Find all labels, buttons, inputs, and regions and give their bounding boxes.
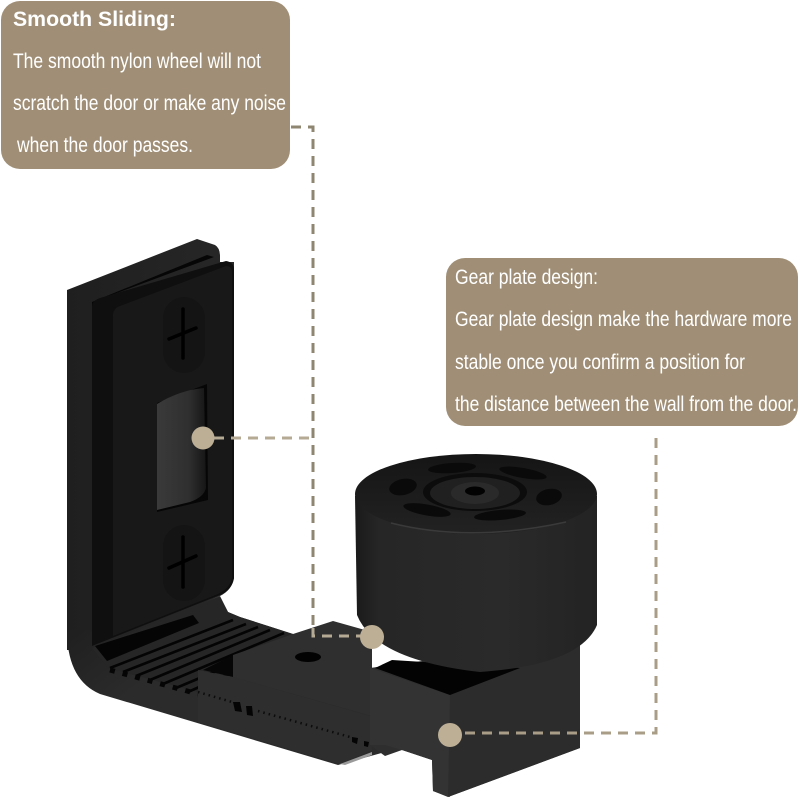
wheel top face <box>355 454 597 534</box>
screw slot top <box>163 297 205 373</box>
ridge teeth <box>110 670 198 694</box>
callout panel: gear plate design <box>446 258 798 426</box>
heading: gear plate design: Gear plate design: <box>455 265 598 289</box>
stop block <box>370 640 580 797</box>
connector: roller dot <box>214 436 313 440</box>
side roller <box>157 384 208 512</box>
gear ridges <box>110 620 284 692</box>
wheel hub <box>423 473 527 511</box>
fine gear teeth <box>198 692 350 737</box>
nylon wheel <box>355 454 597 672</box>
callout dot: wheel <box>360 625 384 649</box>
heading: smooth sliding: Smooth Sliding: <box>13 7 176 31</box>
wheel side <box>355 496 597 672</box>
connector: gear plate <box>465 432 656 733</box>
wheel slots <box>388 461 563 522</box>
groove under top edge <box>92 255 214 306</box>
text: smooth sliding line 1: The smooth nylon wheel will not <box>13 49 261 73</box>
screw slot bottom <box>163 525 205 601</box>
callout dot: roller <box>192 426 214 450</box>
callout panel: smooth sliding <box>1 1 290 169</box>
text: smooth sliding line 2: scratch the door or make any noise <box>13 91 286 115</box>
ridge floor <box>92 597 293 692</box>
callout dot: gear plate <box>438 723 462 747</box>
underside sliver <box>340 752 372 765</box>
mounting plate face <box>113 266 232 636</box>
shadow strip <box>95 615 199 661</box>
curved lower shell <box>67 596 400 765</box>
connector: smooth sliding <box>291 127 313 628</box>
mounting plate <box>92 261 234 646</box>
plate front <box>198 670 372 764</box>
connector: wheel dot <box>313 628 362 636</box>
gear notches <box>233 702 392 752</box>
text: smooth sliding line 3: when the door passes. <box>16 133 193 157</box>
plate shadow <box>203 655 233 677</box>
back plate <box>67 239 234 650</box>
plate with hole <box>233 621 372 716</box>
bracket: door stop body <box>67 239 400 765</box>
connector lines <box>214 127 656 733</box>
